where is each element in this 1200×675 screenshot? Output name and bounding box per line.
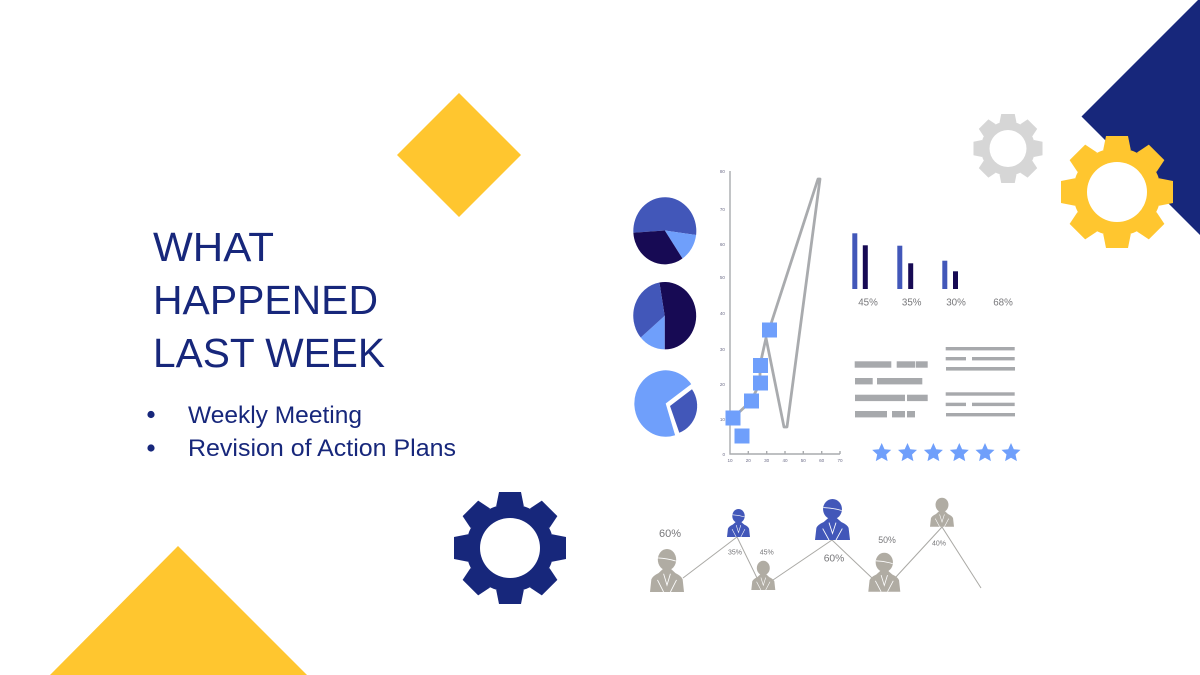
pie chart 3 bbox=[634, 370, 697, 437]
data line bbox=[733, 179, 820, 427]
y axis labels: 50 bbox=[720, 275, 725, 280]
x axis labels: 60 bbox=[819, 458, 825, 463]
yellow triangle bottom left bbox=[50, 546, 307, 675]
percentage labels: 35% bbox=[728, 550, 742, 556]
star rating bbox=[872, 443, 1020, 461]
title bbox=[153, 224, 385, 376]
person 4 bbox=[815, 499, 850, 540]
x axis labels: 10 bbox=[727, 458, 733, 463]
chart axes bbox=[730, 171, 840, 454]
y axis labels: 20 bbox=[720, 382, 725, 387]
connecting lines bbox=[683, 527, 981, 588]
bar chart bbox=[852, 233, 1013, 308]
y axis labels: 0 bbox=[722, 452, 725, 457]
person 5 bbox=[868, 553, 900, 592]
bullet list: Revision of Action Plans bbox=[188, 435, 456, 462]
data points bbox=[726, 322, 777, 444]
title: LAST WEEK bbox=[153, 330, 385, 376]
x axis labels: 20 bbox=[746, 458, 751, 463]
x axis labels bbox=[727, 458, 843, 463]
y axis labels: 40 bbox=[720, 311, 725, 316]
y axis labels: 10 bbox=[720, 417, 725, 422]
y axis labels: 80 bbox=[720, 169, 725, 174]
person 6 bbox=[930, 498, 954, 527]
person 2 bbox=[727, 509, 750, 537]
person 1 bbox=[650, 549, 684, 592]
bar labels: 30% bbox=[946, 297, 966, 308]
bar labels: 35% bbox=[902, 297, 922, 308]
percentage labels: 50% bbox=[878, 535, 896, 545]
people network chart bbox=[650, 498, 981, 592]
icon: yellow gear bbox=[1061, 136, 1173, 248]
icon: navy gear bbox=[454, 492, 566, 604]
y axis labels: 30 bbox=[720, 347, 725, 352]
bullet list bbox=[147, 402, 456, 462]
x axis labels: 70 bbox=[837, 458, 843, 463]
text placeholder block right bbox=[946, 347, 1015, 416]
bullet list: Weekly Meeting bbox=[188, 402, 362, 429]
yellow diamond bbox=[397, 93, 521, 217]
line chart bbox=[720, 169, 843, 463]
x axis labels: 40 bbox=[782, 458, 788, 463]
pie chart 1 bbox=[633, 197, 696, 264]
icon: gray gear bbox=[974, 114, 1042, 183]
bar labels bbox=[858, 297, 1013, 308]
x axis labels: 50 bbox=[801, 458, 806, 463]
percentage labels: 60% bbox=[659, 528, 681, 540]
x axis labels: 30 bbox=[764, 458, 770, 463]
y axis labels: 60 bbox=[720, 242, 725, 247]
bar labels: 68% bbox=[993, 297, 1013, 308]
y axis labels: 70 bbox=[720, 207, 725, 212]
title: HAPPENED bbox=[153, 277, 378, 323]
y axis labels bbox=[720, 169, 725, 457]
pie chart 2 bbox=[633, 282, 696, 349]
percentage labels bbox=[659, 528, 946, 565]
percentage labels: 40% bbox=[932, 540, 946, 548]
navy triangle top right bbox=[1082, 0, 1200, 235]
text placeholder block left bbox=[855, 361, 928, 417]
person 3 bbox=[751, 561, 775, 590]
percentage labels: 45% bbox=[760, 550, 774, 556]
bar labels: 45% bbox=[858, 297, 878, 308]
percentage labels: 60% bbox=[824, 554, 844, 565]
title: WHAT bbox=[153, 224, 274, 270]
